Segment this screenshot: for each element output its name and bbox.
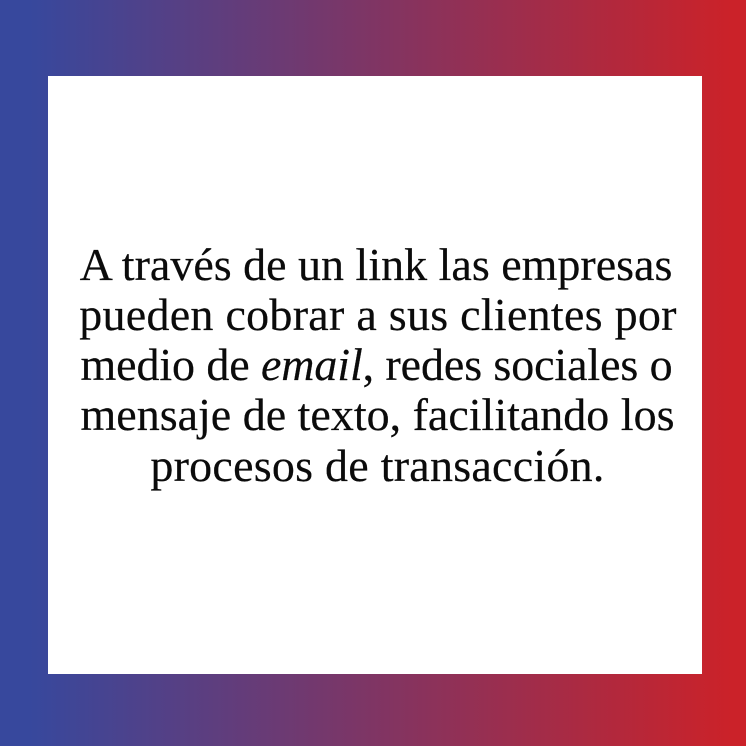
- text block: main message: A través de un link las empresas: [80, 238, 672, 290]
- text block: main message: mensaje de texto, facilitando los: [80, 389, 674, 440]
- text block: main message: [79, 238, 677, 491]
- text block: main message: medio de email, redes sociales o: [80, 339, 673, 390]
- text block: main message: pueden cobrar a sus clientes por: [79, 289, 677, 340]
- text block: main message: procesos de transacción.: [150, 440, 605, 491]
- panel: white card: [48, 76, 702, 674]
